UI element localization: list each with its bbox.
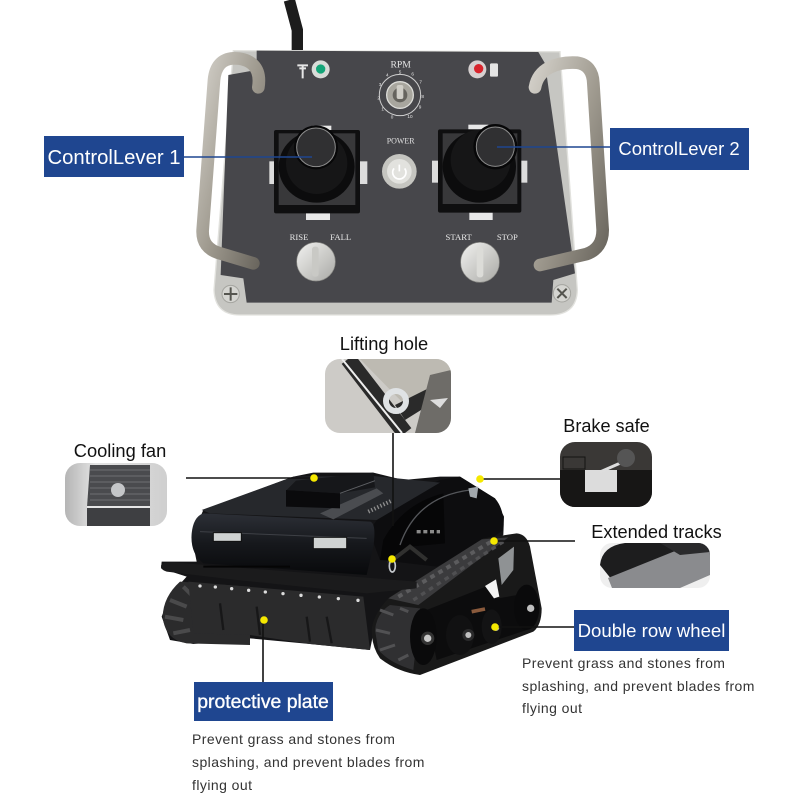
mower robot photo: [161, 473, 504, 650]
description: double row wheel: flying out: [522, 700, 582, 716]
cable: [289, 0, 297, 50]
thumbnail: extended tracks: [600, 543, 710, 588]
thumbnail: brake safe: [560, 442, 652, 507]
wheels: [410, 608, 437, 665]
RPM dial: RPM: [390, 59, 411, 70]
label: ControlLever 2: ControlLever 2: [618, 138, 740, 159]
leader line: lever 2: [497, 146, 610, 148]
dark face plate: [221, 51, 575, 303]
RPM dial: 6: [411, 71, 414, 76]
rear dark side: [370, 477, 504, 567]
RPM dial: 2: [377, 95, 380, 100]
heading: Brake safe: Brake safe: [563, 416, 650, 436]
RPM dial: 3: [379, 82, 382, 87]
RPM dial: 10: [407, 114, 413, 119]
description: protective plate: Prevent grass and stones from: [192, 731, 395, 747]
label: ControlLever 2: [610, 128, 749, 170]
RPM dial: 8: [421, 94, 424, 99]
track outer: [372, 533, 542, 675]
label: ControlLever 1: [44, 136, 184, 177]
RPM dial: 9: [419, 105, 422, 110]
rise fall switch: RISE: [290, 232, 308, 242]
leader lines and markers: [186, 432, 575, 682]
rise fall switch: FALL: [330, 232, 351, 242]
RPM dial: 1: [381, 107, 384, 112]
description: protective plate: flying out: [192, 777, 252, 793]
start stop switch: STOP: [497, 232, 518, 242]
label: Double row wheel: Double row wheel: [578, 620, 725, 641]
label: protective plate: [194, 682, 333, 721]
top cover: [202, 476, 440, 520]
description: double row wheel: splashing, and prevent blades from: [522, 678, 755, 694]
indicator: battery lamp: [468, 60, 498, 78]
bumper bar: [161, 562, 417, 593]
spring hub: [498, 547, 514, 585]
headlights: [213, 533, 241, 541]
rise fall switch: [290, 232, 351, 281]
corner screws: [222, 285, 239, 303]
gap: [485, 579, 499, 598]
indicator: signal lamp: [297, 60, 330, 78]
label: Double row wheel: [574, 610, 729, 651]
thumbnail: lifting hole: [325, 359, 451, 433]
RPM dial: [377, 59, 424, 120]
left rubber wheel: [163, 582, 250, 645]
front tread: [375, 605, 420, 670]
power button: [382, 137, 417, 189]
silhouette backing: [161, 473, 504, 650]
metal frame: [214, 51, 577, 315]
main body shell: [191, 513, 374, 575]
lever 1: [269, 125, 367, 220]
inner frame: [427, 585, 527, 660]
lever 2: [432, 124, 527, 220]
left handle: [203, 58, 259, 263]
cooling fan box: [287, 473, 375, 493]
heading: Extended tracks: Extended tracks: [591, 522, 722, 542]
leader line: lever 1: [184, 156, 312, 158]
RPM dial: 0: [391, 115, 394, 120]
start stop switch: [446, 232, 518, 282]
heading: Lifting hole: Lifting hole: [340, 333, 428, 354]
description: protective plate: splashing, and prevent blades from: [192, 754, 425, 770]
bumper and protective plate: [161, 562, 417, 650]
control panel photo: [203, 0, 603, 315]
right handle: [535, 63, 603, 265]
heading: Cooling fan: Cooling fan: [74, 440, 166, 461]
RPM dial: 4: [386, 73, 389, 78]
thumbnail: cooling fan: [65, 463, 167, 526]
start stop switch: START: [446, 232, 472, 242]
label: protective plate: protective plate: [197, 691, 329, 713]
right track assembly: [372, 533, 542, 675]
description: double row wheel: Prevent grass and stones from: [522, 655, 725, 671]
RPM dial: 7: [419, 79, 422, 84]
protective plate: [188, 582, 370, 650]
upper tread: [388, 537, 508, 605]
power button: POWER: [387, 137, 415, 146]
label: ControlLever 1: ControlLever 1: [47, 147, 181, 169]
RPM dial: 5: [399, 69, 402, 74]
